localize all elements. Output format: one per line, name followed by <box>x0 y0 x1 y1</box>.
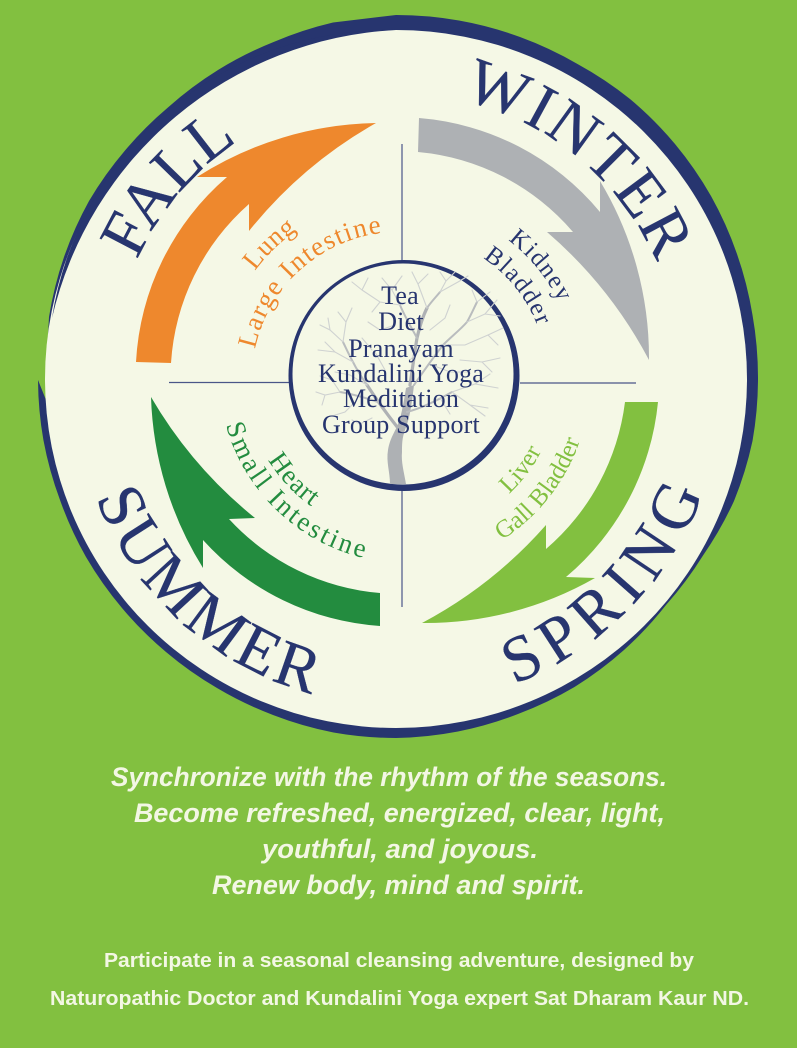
icon: bare tree <box>316 272 503 484</box>
centre text list <box>318 281 484 439</box>
label: spring organs: Liver <box>498 446 540 494</box>
tagline: Become refreshed, energized, clear, light, <box>134 798 665 828</box>
label: winter organs <box>484 228 570 324</box>
centre text list: Tea <box>381 281 419 310</box>
tagline: youthful, and joyous. <box>260 834 538 864</box>
arrow: spring (light green) <box>422 402 658 623</box>
heading: spring: SPRING <box>503 484 700 682</box>
label: winter organs: Bladder <box>484 245 548 324</box>
credit text: Participate in a seasonal cleansing adventure, designed by <box>104 950 695 972</box>
arrow: summer (dark green) <box>151 397 380 626</box>
heading: winter: WINTER <box>476 58 688 262</box>
centre text list: Kundalini Yoga <box>318 359 484 388</box>
arrow: winter (grey) <box>418 118 649 360</box>
centre text list: Meditation <box>343 384 459 413</box>
centre text list: Pranayam <box>348 334 454 363</box>
tagline: Synchronize with the rhythm of the seasons. <box>111 762 667 792</box>
tagline: Renew body, mind and spirit. <box>212 870 585 900</box>
centre text list: Group Support <box>322 410 481 439</box>
label: winter organs: Kidney <box>508 228 570 298</box>
credit text: Naturopathic Doctor and Kundalini Yoga expert Sat Dharam Kaur ND. <box>50 988 749 1010</box>
credit text <box>50 950 749 1010</box>
label: summer organs: Small Intestine <box>226 422 365 558</box>
label: fall organs: Lung <box>242 220 298 270</box>
heading: fall: FALL <box>100 118 234 258</box>
heading: summer: SUMMER <box>98 488 316 694</box>
centre circle <box>288 260 520 491</box>
label: fall organs: Large Intestine <box>238 221 380 348</box>
outer brush ring <box>38 15 758 738</box>
tagline <box>111 762 667 900</box>
label: summer organs: Heart <box>268 450 318 506</box>
label: spring organs: Gall Bladder <box>496 436 579 537</box>
ring inner brush crescent, upper left <box>52 30 396 318</box>
cream disc <box>45 30 747 728</box>
centre text list: Diet <box>378 307 424 336</box>
cross divider lines <box>169 144 636 607</box>
arrow: fall (orange) <box>136 123 376 363</box>
